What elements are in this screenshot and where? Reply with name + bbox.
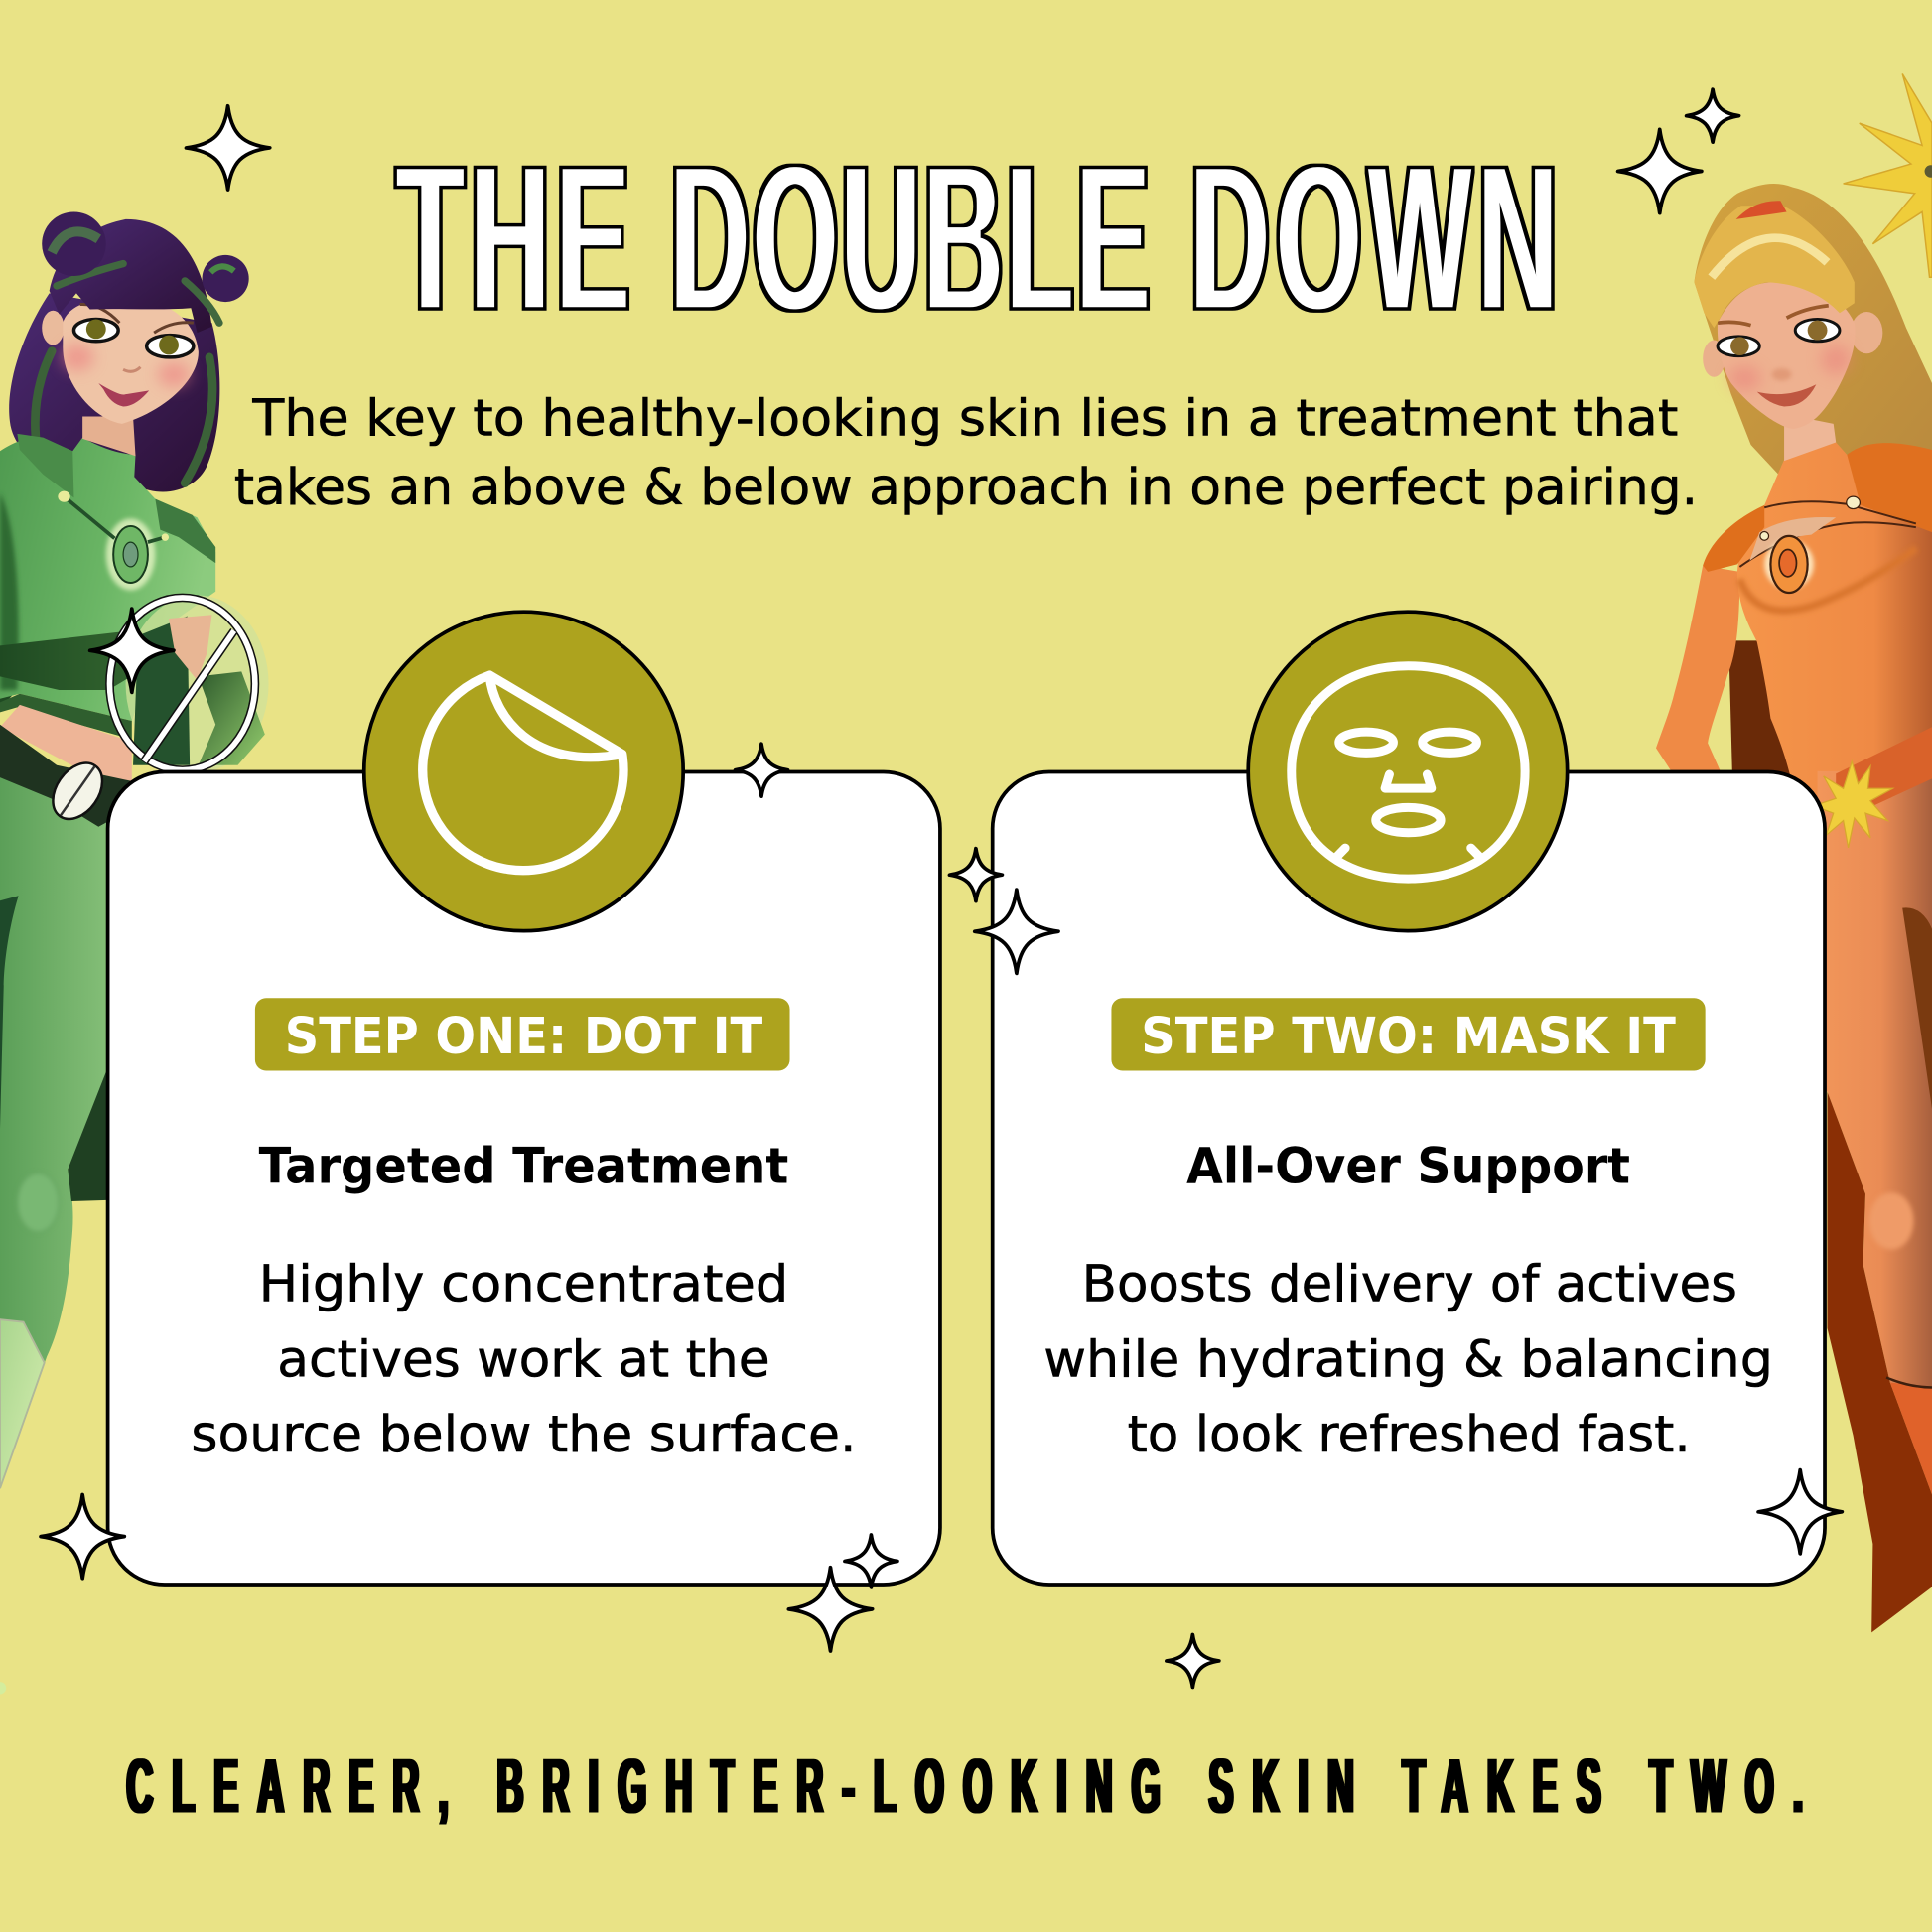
inner thigh shadow xyxy=(1902,907,1932,1109)
neck xyxy=(82,416,136,456)
strap xyxy=(65,496,165,542)
character: orange heroine xyxy=(1656,73,1932,1632)
torso xyxy=(1737,443,1932,863)
footer tagline: CLEARER, BRIGHTER-LOOKING SKIN TAKES TWO. xyxy=(126,1742,1803,1829)
lips xyxy=(98,383,149,407)
torso xyxy=(0,438,215,721)
forearm xyxy=(0,632,139,690)
intro paragraph: The key to healthy-looking skin lies in a treatment that xyxy=(251,389,1678,448)
belt star xyxy=(1814,761,1892,848)
nose xyxy=(123,367,140,371)
cheeks xyxy=(1728,345,1851,390)
leg and hip xyxy=(1818,771,1932,1494)
bun left green xyxy=(52,231,98,252)
belt xyxy=(0,725,132,827)
back cape xyxy=(1728,640,1811,776)
hair back xyxy=(1694,184,1932,481)
head xyxy=(1694,201,1882,429)
head xyxy=(42,211,249,424)
step two label: STEP TWO: MASK IT xyxy=(1141,1007,1676,1065)
beads xyxy=(1760,496,1860,540)
nose xyxy=(1772,368,1792,380)
torso shadow xyxy=(0,492,19,690)
cape lower left xyxy=(0,896,19,1129)
step one heading: Targeted Treatment xyxy=(259,1137,788,1194)
step one description: source below the surface. xyxy=(191,1405,857,1463)
gauntlet xyxy=(199,671,265,765)
title: THE xyxy=(397,120,629,355)
boot xyxy=(1890,1382,1932,1494)
shoulder drape left xyxy=(1703,505,1764,572)
red hair clip xyxy=(1736,201,1787,219)
hair back xyxy=(9,293,219,491)
bun left xyxy=(42,211,106,276)
belt xyxy=(1836,727,1932,823)
shoulder drape right xyxy=(1847,443,1932,532)
ear xyxy=(42,311,65,345)
intro paragraph: takes an above & below approach in one perfect pairing. xyxy=(234,458,1698,516)
medallion xyxy=(1764,536,1814,593)
cheeks xyxy=(62,344,190,387)
step two description: while hydrating & balancing xyxy=(1043,1329,1773,1388)
leg and hip xyxy=(0,776,111,1488)
eyes xyxy=(73,304,194,357)
step one description xyxy=(191,1255,857,1463)
bust shading xyxy=(1739,548,1916,611)
step two description xyxy=(1043,1255,1773,1463)
headband xyxy=(1712,238,1828,277)
step one description: Highly concentrated xyxy=(259,1255,788,1313)
step two description: to look refreshed fast. xyxy=(1128,1405,1691,1463)
shoulder drape left xyxy=(17,434,73,497)
face xyxy=(1718,282,1856,429)
neck xyxy=(1784,414,1836,461)
boot band xyxy=(1886,1378,1932,1387)
lower cape xyxy=(1828,1092,1932,1632)
ears xyxy=(1703,312,1882,377)
hair crown xyxy=(1694,206,1855,328)
sparkles xyxy=(41,89,1842,1687)
waistband xyxy=(0,694,132,740)
character: green heroine xyxy=(0,211,269,1694)
chest opening xyxy=(1749,517,1836,561)
boot xyxy=(0,1319,45,1488)
icon: sticker badge xyxy=(364,612,683,931)
step one description: actives work at the xyxy=(277,1329,770,1388)
knee xyxy=(1869,1192,1913,1249)
bun right green xyxy=(210,266,234,272)
hair top xyxy=(50,219,211,333)
medallion xyxy=(106,518,155,590)
intro paragraph xyxy=(234,389,1698,516)
card background xyxy=(108,772,940,1585)
strap beads xyxy=(58,491,169,541)
hair green band xyxy=(57,264,219,323)
cape behind torso xyxy=(0,492,20,709)
title: DOWN xyxy=(1190,120,1558,355)
arm xyxy=(1656,566,1739,776)
collar lines xyxy=(1739,501,1916,567)
step two heading: All-Over Support xyxy=(1186,1137,1630,1194)
cape behind arm xyxy=(133,617,190,765)
shield glow xyxy=(126,595,269,772)
knee xyxy=(17,1173,60,1232)
star burst centre xyxy=(1925,165,1932,178)
belly xyxy=(0,705,132,783)
panel: step two card xyxy=(993,612,1825,1585)
bun right xyxy=(203,255,249,302)
star burst top right xyxy=(1844,73,1932,277)
step two description: Boosts delivery of actives xyxy=(1082,1255,1737,1313)
cape behind leg xyxy=(68,1059,111,1201)
lips xyxy=(1757,384,1816,407)
hair streaks xyxy=(35,351,212,483)
belt buckle xyxy=(43,754,112,828)
shoulder drape right xyxy=(155,499,215,563)
title: DOUBLE xyxy=(670,120,1150,355)
shield ring xyxy=(109,598,255,770)
icon: sheet mask badge xyxy=(1248,612,1568,931)
eyes xyxy=(1718,306,1840,356)
card background xyxy=(993,772,1825,1585)
panel: step one card xyxy=(108,612,940,1585)
bare upper arm xyxy=(169,615,211,680)
step one label: STEP ONE: DOT IT xyxy=(285,1007,762,1065)
face xyxy=(63,299,199,424)
title xyxy=(397,120,1558,355)
boot tip xyxy=(0,1682,6,1694)
